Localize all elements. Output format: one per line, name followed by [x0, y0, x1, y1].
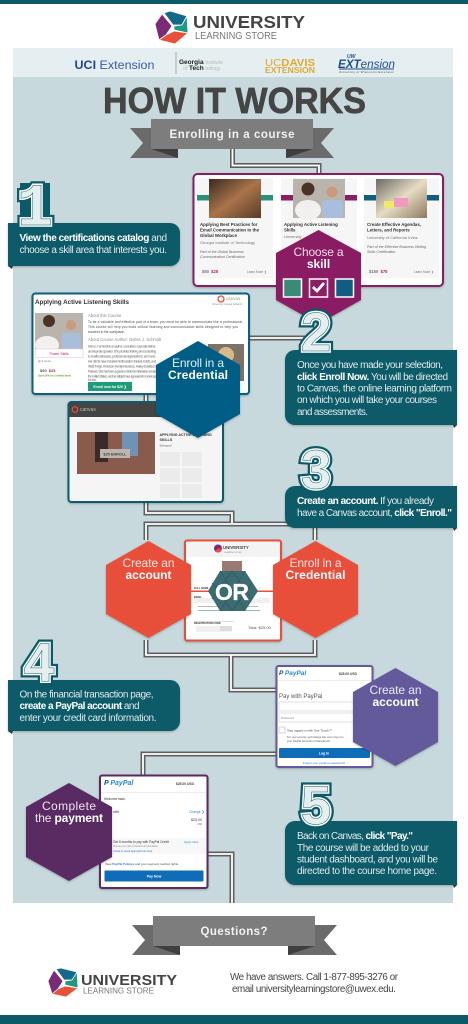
bottom bar — [0, 1015, 468, 1024]
logo: UW Extension — [338, 54, 395, 74]
panel: course detail screenshot: $50 $25 — [40, 368, 56, 373]
step number 1: 1 — [17, 176, 53, 244]
step number 3: 3 — [301, 438, 331, 500]
course card 3 — [364, 178, 439, 278]
panel: course detail screenshot: @ 0 hours — [38, 359, 52, 363]
panel: course catalog screenshot — [194, 174, 443, 286]
panel: course detail screenshot: Save 50% for a limited time! — [38, 374, 71, 378]
course meta grid — [160, 452, 202, 498]
mini logo: LEARNING STORE — [224, 551, 242, 554]
panel: canvas enroll screenshot: Self-paced — [160, 444, 172, 448]
contact text: email universitylearningstore@uwex.edu. — [232, 984, 396, 995]
header logo — [155, 11, 305, 44]
step 2 callout: and assessments. — [297, 407, 368, 418]
step 1 callout — [8, 223, 180, 269]
course card 1: Part of the Global Business — [200, 250, 244, 254]
ribbon: Enrolling in a course — [130, 119, 334, 158]
top bar — [0, 0, 468, 4]
course description: To be a valuable and effective part of a team, you must be able to communicate like a professional. — [88, 320, 243, 324]
step number 2: 2 — [301, 301, 331, 363]
step 4 callout: enter your credit card information. — [20, 713, 156, 724]
course card 2 — [281, 178, 357, 278]
panel: PayPal login screenshot: Pay with PayPal — [279, 694, 322, 700]
course description: and keynote speaker. She provides training and consulting — [88, 350, 156, 354]
enroll button: Enroll now for $25 ❯ — [93, 385, 127, 389]
step 3 callout: Create an account. If you already — [297, 496, 434, 507]
course card 1: Georgia Institute of Technology — [200, 240, 255, 245]
course card 2: Applying Active Listening — [284, 222, 338, 227]
hexagon: enroll in a credential (orange): Credential — [286, 568, 346, 582]
hexagon: complete the payment — [26, 783, 112, 881]
logo: Georgia Tech: Georgia Institute — [179, 59, 223, 66]
enroll button — [88, 382, 132, 391]
panel: checkout screenshot — [185, 540, 281, 640]
step 2 callout: on which you will take your courses — [297, 395, 437, 406]
course description: the United States, and her articles have appeared in numerous — [88, 374, 156, 378]
step number 1: 1 — [17, 176, 53, 244]
hexagon: enroll in a credential (orange) — [273, 541, 358, 638]
logo wordmark: UNIVERSITY — [193, 12, 305, 32]
icon: logo cube — [48, 968, 78, 997]
footer logo — [48, 968, 177, 997]
hexagon: choose a skill: Choose a — [294, 245, 344, 259]
step 5 callout: The course will be added to your — [297, 843, 430, 854]
step number 5: 5 — [301, 774, 331, 836]
ribbon: questions: Questions? — [200, 926, 268, 938]
connectors — [143, 149, 319, 903]
course description: forms. — [88, 378, 97, 382]
course card 1: $50 $25 — [202, 269, 219, 274]
hexagon: choose a skill: skill — [307, 257, 330, 271]
course card 3: Learn More ❯ — [414, 270, 434, 274]
panel: canvas enroll screenshot: APPLYING ACTIVE LISTENING — [160, 433, 212, 437]
step 5 callout — [285, 821, 457, 888]
course card 1: Global Workplace — [200, 233, 238, 238]
step 2 callout: click Enroll Now. You will be directed — [297, 372, 448, 383]
hexagon: create an account (purple): Create an — [370, 683, 422, 697]
hexagon: enroll in a credential: Credential — [168, 368, 228, 382]
icon: green option — [284, 279, 302, 297]
hexagon: complete the payment: Complete — [42, 799, 96, 813]
course description: succeed in the workplace. — [88, 330, 125, 334]
step number 2: 2 — [301, 301, 331, 363]
course card 3: $150 $75 — [369, 269, 388, 274]
course card 1 — [197, 178, 273, 278]
contact text: We have answers. Call 1-877-895-3276 or — [230, 972, 399, 983]
panel: PayPal payment screenshot: P PayPal — [104, 780, 134, 787]
step 5 callout: student dashboard, and you will be — [297, 854, 438, 866]
logo subtitle: LEARNING STORE — [83, 986, 154, 996]
hexagon: complete the payment: the payment — [35, 811, 103, 825]
step number 1: 1 — [17, 176, 53, 244]
course description: About this Course — [88, 313, 122, 318]
step 3 callout — [285, 486, 457, 531]
or line — [185, 590, 275, 592]
step 4 callout — [8, 680, 180, 734]
course card 2: Skills — [284, 228, 296, 232]
course card 1: Applying Best Practices for — [200, 222, 258, 227]
panel: PayPal login screenshot — [276, 666, 372, 767]
panel: course detail screenshot: Applying Active Listening Skills — [35, 299, 129, 306]
panel: PayPal payment screenshot: View PayPal Policies and your payment method rights. — [105, 862, 179, 866]
enroll photo — [77, 432, 155, 474]
course card 3: Skills Certification — [367, 250, 395, 254]
logo: UCI Extension: UCI Extension — [74, 60, 154, 72]
step 4 callout: create a PayPal account and — [20, 701, 140, 712]
course description: to small businesses, professional organizations, and more. — [88, 354, 156, 358]
panel: checkout screenshot: Total: $25.00 — [248, 625, 272, 630]
course card 3: Part of the Effective Business Writing — [367, 245, 426, 249]
step number 4: 4 — [24, 631, 55, 693]
panel: PayPal login screenshot: Forgot your email or password? — [303, 761, 345, 765]
panel: PayPal payment screenshot: Change ❯ — [189, 810, 204, 814]
contact text — [230, 972, 399, 995]
panel: PayPal payment screenshot — [100, 776, 208, 888]
hexagon: enroll in a credential — [156, 341, 240, 438]
logo: UC Davis Extension: UCDAVIS — [265, 57, 315, 69]
panel: canvas enroll screenshot: SKILLS — [160, 438, 173, 442]
step number 4: 4 — [24, 631, 55, 693]
course description: Packers. She has been a guest on radio and television across — [88, 370, 156, 374]
panel: checkout screenshot: EMAIL — [194, 596, 202, 599]
step 2 callout: to Canvas, the online learning platform — [297, 384, 452, 394]
panel: PayPal login screenshot: your PayPal personal or financial info. — [287, 739, 331, 743]
panel: course detail screenshot: Power Skills — [49, 352, 69, 356]
step 1 callout: choose a skill area that interests you. — [20, 245, 167, 256]
step 5 callout: directed to the course home page. — [297, 866, 437, 877]
step 2 callout — [285, 350, 457, 428]
step 1 callout: View the certifications catalog and — [20, 233, 167, 244]
logo: Georgia Tech — [176, 52, 223, 74]
logo: UW Extension: EXTension — [338, 57, 395, 71]
hexagon: enroll in a credential (orange): Enroll in a — [290, 556, 342, 570]
panel: PayPal payment screenshot: with — [113, 810, 119, 814]
logo: UW Extension: University of Wisconsin-Extension — [339, 70, 394, 74]
panel: PayPal login screenshot: Stay logged in with One Touch™ — [287, 728, 332, 732]
step 5 callout: Back on Canvas, click "Pay." — [297, 831, 413, 842]
step number 5: 5 — [301, 774, 331, 836]
hexagon: create an account (orange) — [106, 541, 191, 638]
panel: PayPal payment screenshot: $25.00 USD — [176, 782, 195, 786]
panel: PayPal login screenshot: Log In — [319, 752, 329, 756]
icon: blue option — [336, 279, 354, 297]
logo: UC Davis Extension: EXTENSION — [265, 66, 315, 75]
title: HOW IT WORKS — [103, 80, 366, 121]
logo subtitle: LEARNING STORE — [195, 31, 277, 42]
course card 3: Create Effective Agendas, — [367, 222, 421, 227]
step number 3: 3 — [301, 438, 331, 500]
partner logos band — [13, 48, 453, 77]
panel: PayPal payment screenshot: USD — [197, 823, 202, 826]
canvas logo: canvas — [226, 296, 241, 301]
icon: logo cube — [155, 11, 188, 44]
course card 1: Communication Certification — [200, 255, 245, 259]
panel: canvas enroll screenshot — [68, 402, 223, 502]
panel: PayPal payment screenshot: Pay Now — [147, 874, 162, 878]
hexagon: create an account (orange): Create an — [122, 556, 174, 570]
course photo — [35, 313, 83, 354]
course description: This course will help you build critical listening and communication skills designed to help you — [88, 325, 238, 329]
step number 4: 4 — [24, 631, 55, 693]
course description: Wells Fargo. American Family Insurance, Harley-Davidson, — [88, 364, 156, 368]
panel: checkout screenshot: FULL NAME — [194, 587, 209, 590]
step 4 callout: On the financial transaction page, — [20, 690, 154, 700]
panel: PayPal payment screenshot: Check to avoid approval fees here — [113, 849, 153, 853]
hexagon: choose a skill — [276, 230, 361, 324]
course card 3: Letters, and Reports — [367, 228, 410, 232]
panel: PayPal login screenshot: For your security, we'll always ask you to log in to — [287, 735, 344, 739]
course description: Debra J. Schmidt is an author, consultant, corporate trainer, — [88, 344, 156, 348]
logo wordmark: UNIVERSITY — [81, 972, 177, 989]
course card 3: University of California Irvine — [367, 235, 419, 240]
canvas logo: University Canvas Network — [212, 303, 243, 306]
or badge: OR — [215, 579, 249, 605]
panel: PayPal payment screenshot: Welcome back, — [104, 797, 126, 801]
mini logo — [214, 544, 249, 554]
ribbon: questions — [132, 916, 337, 955]
step number 3: 3 — [301, 438, 331, 500]
panel: course detail screenshot — [32, 294, 249, 394]
panel: canvas enroll screenshot: canvas — [80, 407, 96, 413]
course card 1: Learn More ❯ — [247, 270, 267, 274]
panel: PayPal payment screenshot: Choose your plan at checkout for purchases — [113, 845, 159, 848]
step 3 callout: have a Canvas account, click "Enroll." — [297, 508, 452, 519]
step 2 callout: Once you have made your selection, — [297, 360, 443, 371]
hexagon: create an account (orange): account — [126, 568, 172, 582]
panel: PayPal payment screenshot: $25.00 — [191, 818, 202, 822]
hexagon: enroll in a credential: Enroll in a — [172, 356, 224, 370]
ribbon: Enrolling in a course: Enrolling in a course — [170, 129, 294, 141]
hexagon: create an account (purple): account — [372, 695, 418, 709]
panel: checkout screenshot: REGISTRATION CODE — [194, 622, 221, 625]
panel: PayPal login screenshot: P PayPal — [279, 670, 306, 677]
main background panel — [13, 77, 453, 903]
logo: Georgia Tech: of Tech nology — [183, 65, 221, 72]
logo: UW Extension: UW — [347, 54, 357, 60]
panel: PayPal payment screenshot: Get 6 months to pay with PayPal Credit — [113, 840, 169, 844]
panel: PayPal login screenshot: $25.00 USD — [339, 672, 358, 676]
step number 2: 2 — [301, 301, 331, 363]
step number 5: 5 — [301, 774, 331, 836]
course description: Her clients have included Northwestern Mutual, Kohl's, and — [88, 360, 156, 364]
logo: UC Davis Extension — [265, 57, 315, 75]
panel: PayPal payment screenshot: Apply Now — [184, 840, 199, 844]
course description — [88, 313, 243, 382]
panel: PayPal login screenshot: Password — [281, 716, 295, 720]
icon: checked option — [310, 279, 328, 297]
course card 1: Email Communication in the — [200, 228, 260, 232]
canvas logo — [212, 296, 243, 306]
or badge — [208, 571, 258, 611]
course description: About Course Author: Debra J. Schmidt — [88, 337, 162, 342]
mini logo: UNIVERSITY — [223, 545, 249, 550]
enroll photo: $25 ENROLL — [104, 452, 127, 456]
hexagon: create an account (purple) — [353, 668, 438, 766]
course card 2: University — [284, 234, 302, 239]
